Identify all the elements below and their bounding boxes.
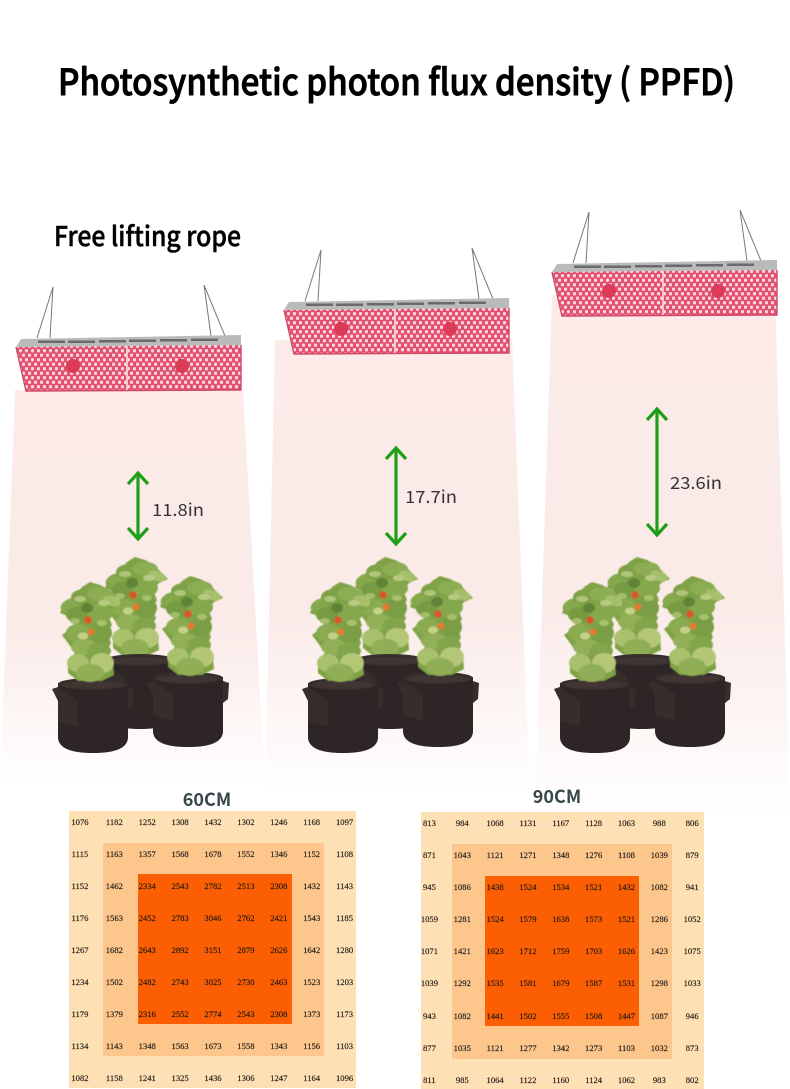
PPFD heat map: 60CM: 2308 <box>270 881 287 891</box>
PPFD heat map: 90CM: 1071 <box>421 946 438 956</box>
PPFD heat map: 60CM: 2879 <box>237 945 254 955</box>
PPFD heat map: 90CM: 1122 <box>520 1075 536 1085</box>
PPFD heat map: 90CM: 1167 <box>552 818 569 828</box>
PPFD heat map: 60CM: 1143 <box>336 881 353 891</box>
PPFD heat map: 90CM: 802 <box>686 1075 699 1085</box>
PPFD heat map: 60CM: 1568 <box>172 849 189 859</box>
PPFD heat map: 90CM: 1579 <box>519 914 537 924</box>
PPFD heat map: 90CM: 983 <box>653 1075 666 1085</box>
PPFD heat map: 90CM: 1039 <box>651 850 668 860</box>
PPFD heat map: 90CM: 871 <box>423 850 436 860</box>
PPFD heat map: 90CM: 1124 <box>585 1075 602 1085</box>
plants in pots: 11.8in <box>52 557 229 753</box>
plants in pots: 23.6in <box>554 557 731 753</box>
PPFD heat map: 60CM: 2421 <box>270 913 287 923</box>
PPFD heat map: 90CM: 1082 <box>454 1011 471 1021</box>
PPFD heat map: 90CM: 1087 <box>651 1011 668 1021</box>
PPFD heat map: 60CM: 1373 <box>303 1009 320 1019</box>
PPFD heat map: 90CM: 1068 <box>487 818 504 828</box>
PPFD heat map: 60CM: 1185 <box>336 913 353 923</box>
PPFD heat map: 90CM: 1271 <box>519 850 537 860</box>
PPFD heat map: 90CM: 1703 <box>585 946 602 956</box>
PPFD heat map: 90CM: 1626 <box>618 946 635 956</box>
PPFD heat map: 60CM: 2463 <box>270 977 287 987</box>
plants in pots: 17.7in <box>302 557 479 753</box>
PPFD heat map: 60CM: 1173 <box>336 1009 353 1019</box>
PPFD heat map: 60CM: 2543 <box>172 881 189 891</box>
PPFD heat map: 60CM: 1642 <box>303 945 320 955</box>
PPFD heat map: 60CM: 1179 <box>72 1009 88 1019</box>
PPFD heat map: 60CM: 1432 <box>204 817 222 827</box>
PPFD heat map: 90CM: 1432 <box>618 882 635 892</box>
PPFD heat map: 60CM: 1158 <box>106 1073 123 1083</box>
PPFD heat map: 60CM: 2552 <box>172 1009 189 1019</box>
PPFD heat map: 90CM: 1064 <box>487 1075 504 1085</box>
PPFD heat map: 60CM: 2774 <box>204 1009 222 1019</box>
PPFD heat map: 60CM: 1346 <box>270 849 287 859</box>
PPFD heat map: 60CM: 1234 <box>71 977 89 987</box>
PPFD heat map: 90CM: 1063 <box>618 818 635 828</box>
PPFD heat map: 90CM: 1423 <box>651 946 668 956</box>
PPFD heat map: 90CM: 1447 <box>618 1011 635 1021</box>
PPFD heat map: 60CM: 1156 <box>303 1041 320 1051</box>
PPFD heat map: 90CM: 1052 <box>684 914 701 924</box>
PPFD heat map: 60CM: 1115 <box>72 849 88 859</box>
heading: 60CM: 60CM <box>183 786 231 812</box>
distance label: 11.8in: 11.8in <box>152 496 204 521</box>
arrow: 23.6in <box>647 409 667 535</box>
PPFD heat map: 90CM: 1286 <box>651 914 668 924</box>
PPFD heat map: 90CM: 1521 <box>618 914 635 924</box>
PPFD heat map: 60CM: 1343 <box>270 1041 287 1051</box>
PPFD heat map: 90CM: 1033 <box>684 978 701 988</box>
PPFD heat map: 90CM: 1277 <box>519 1043 537 1053</box>
PPFD heat map: 60CM: 1096 <box>336 1073 353 1083</box>
PPFD heat map: 90CM: 943 <box>423 1011 436 1021</box>
PPFD heat map: 60CM: 2762 <box>237 913 254 923</box>
PPFD heat map: 60CM: 1097 <box>336 817 353 827</box>
PPFD heat map: 60CM: 1523 <box>303 977 320 987</box>
PPFD heat map: 90CM: 1342 <box>552 1043 569 1053</box>
light beam: 11.8in <box>0 390 265 785</box>
PPFD heat map: 60CM: 1325 <box>172 1073 189 1083</box>
heading: 90CM: 90CM <box>533 783 581 809</box>
PPFD heat map: 90CM: 1103 <box>618 1043 635 1053</box>
lamp at 23.6in <box>552 210 777 316</box>
PPFD heat map: 90CM: 1035 <box>454 1043 471 1053</box>
PPFD heat map: 60CM: 2482 <box>139 977 156 987</box>
arrow: 17.7in <box>386 448 406 544</box>
PPFD heat map: 90CM: 984 <box>456 818 469 828</box>
PPFD heat map: 90CM: 1712 <box>519 946 537 956</box>
PPFD heat map: 60CM: 1558 <box>237 1041 254 1051</box>
PPFD heat map: 90CM: 879 <box>686 850 699 860</box>
PPFD heat map: 90CM: 873 <box>686 1043 699 1053</box>
PPFD heat map: 90CM: 1062 <box>618 1075 635 1085</box>
PPFD heat map: 60CM: 1182 <box>106 817 123 827</box>
PPFD heat map: 60CM: 1543 <box>303 913 320 923</box>
PPFD heat map: 60CM: 2782 <box>204 881 222 891</box>
PPFD heat map: 90CM: 1032 <box>651 1043 668 1053</box>
PPFD heat map: 90CM: 945 <box>423 882 436 892</box>
PPFD heat map: 90CM: 1131 <box>520 818 536 828</box>
PPFD heat map: 60CM: 1252 <box>139 817 156 827</box>
PPFD heat map: 60CM: 1082 <box>71 1073 89 1083</box>
PPFD heat map: 60CM: 1357 <box>139 849 156 859</box>
PPFD heat map: 60CM: 2334 <box>139 881 156 891</box>
PPFD heat map: 90CM: 1298 <box>651 978 668 988</box>
PPFD heat map: 90CM: 1587 <box>585 978 602 988</box>
PPFD heat map: 90CM: 1531 <box>618 978 635 988</box>
PPFD heat map: 60CM: 1302 <box>237 817 254 827</box>
rope label: Free lifting rope <box>54 215 241 254</box>
PPFD heat map: 60CM: 1134 <box>72 1041 88 1051</box>
title: Photosynthetic photon flux density ( PPFD) <box>58 54 735 106</box>
PPFD heat map: 90CM: 946 <box>686 1011 699 1021</box>
PPFD heat map: 90CM: 1039 <box>421 978 438 988</box>
PPFD heat map: 90CM: 1581 <box>519 978 537 988</box>
PPFD heat map: 60CM: 1432 <box>303 881 320 891</box>
PPFD heat map: 60CM: 1176 <box>72 913 88 923</box>
PPFD heat map: 60CM: 1678 <box>204 849 222 859</box>
lamp at 17.7in <box>284 248 509 354</box>
PPFD heat map: 90CM: 1273 <box>585 1043 602 1053</box>
PPFD heat map: 90CM: 1128 <box>585 818 602 828</box>
PPFD heat map: 60CM: 2730 <box>237 977 254 987</box>
PPFD heat map: 60CM: 2452 <box>139 913 156 923</box>
PPFD heat map: 90CM: 1502 <box>519 1011 537 1021</box>
PPFD heat map: 60CM: 2543 <box>237 1009 254 1019</box>
PPFD heat map: 90CM: 806 <box>686 818 699 828</box>
PPFD heat map: 90CM: 1108 <box>618 850 635 860</box>
PPFD heat map: 60CM: 1502 <box>106 977 123 987</box>
arrow: 11.8in <box>128 473 148 539</box>
PPFD heat map: 90CM: 1521 <box>585 882 602 892</box>
PPFD heat map: 60CM: 1152 <box>303 849 320 859</box>
PPFD heat map: 90CM: 1281 <box>454 914 471 924</box>
PPFD heat map: 90CM: 1075 <box>684 946 701 956</box>
PPFD heat map: 60CM: 1563 <box>106 913 123 923</box>
PPFD heat map: 90CM: 1292 <box>454 978 471 988</box>
PPFD heat map: 60CM: 1164 <box>303 1073 320 1083</box>
PPFD heat map: 90CM: 877 <box>423 1043 436 1053</box>
PPFD heat map: 60CM: 1203 <box>336 977 353 987</box>
PPFD heat map: 60CM: 3025 <box>204 977 222 987</box>
PPFD heat map: 60CM: 1152 <box>72 881 88 891</box>
PPFD heat map: 60CM: 1306 <box>237 1073 254 1083</box>
PPFD heat map: 60CM: 1163 <box>106 849 123 859</box>
PPFD heat map: 60CM: 1108 <box>336 849 353 859</box>
PPFD heat map: 60CM: 2783 <box>172 913 189 923</box>
PPFD heat map: 60CM: 1143 <box>106 1041 123 1051</box>
PPFD heat map: 90CM: 1555 <box>552 1011 569 1021</box>
PPFD heat map: 90CM: 1121 <box>487 1043 504 1053</box>
PPFD heat map: 90CM: 1438 <box>487 882 504 892</box>
PPFD heat map: 90CM: 985 <box>456 1075 469 1085</box>
PPFD heat map: 90CM: 811 <box>423 1075 436 1085</box>
PPFD heat map: 90CM: 1160 <box>552 1075 569 1085</box>
PPFD heat map: 60CM: 2316 <box>139 1009 156 1019</box>
PPFD heat map: 90CM: 1059 <box>421 914 438 924</box>
PPFD heat map: 60CM: 1241 <box>139 1073 156 1083</box>
PPFD heat map: 90CM: 1086 <box>454 882 471 892</box>
PPFD heat map: 90CM: 1348 <box>552 850 569 860</box>
PPFD heat map: 60CM: 1379 <box>106 1009 123 1019</box>
PPFD heat map: 60CM: 1682 <box>106 945 123 955</box>
PPFD heat map: 90CM: 1535 <box>487 978 504 988</box>
PPFD heat map: 90CM: 1043 <box>454 850 471 860</box>
PPFD heat map: 90CM: 1573 <box>585 914 602 924</box>
PPFD heat map: 60CM: 3151 <box>204 945 222 955</box>
distance label: 17.7in: 17.7in <box>405 483 457 508</box>
PPFD heat map: 90CM: 941 <box>686 882 699 892</box>
PPFD heat map: 60CM: 1436 <box>204 1073 222 1083</box>
PPFD heat map: 90CM: 1421 <box>454 946 471 956</box>
PPFD heat map: 60CM: 1076 <box>71 817 89 827</box>
PPFD heat map: 90CM: 1524 <box>519 882 537 892</box>
PPFD heat map: 60CM: 2626 <box>270 945 287 955</box>
PPFD heat map: 60CM: 2743 <box>172 977 189 987</box>
PPFD heat map: 60CM: 1247 <box>270 1073 287 1083</box>
PPFD heat map: 90CM: 1524 <box>487 914 504 924</box>
PPFD heat map: 90CM: 988 <box>653 818 666 828</box>
PPFD heat map: 90CM: 1623 <box>487 946 504 956</box>
PPFD heat map: 60CM: 1563 <box>172 1041 189 1051</box>
PPFD heat map: 90CM: 813 <box>423 818 436 828</box>
PPFD heat map: 90CM: 1441 <box>487 1011 504 1021</box>
PPFD heat map: 60CM: 2308 <box>270 1009 287 1019</box>
PPFD heat map: 90CM: 1759 <box>552 946 569 956</box>
PPFD heat map: 60CM: 1552 <box>237 849 254 859</box>
PPFD heat map: 60CM: 1168 <box>303 817 320 827</box>
PPFD heat map: 90CM: 1534 <box>552 882 569 892</box>
PPFD heat map: 60CM: 1280 <box>336 945 353 955</box>
PPFD heat map: 90CM: 1121 <box>487 850 504 860</box>
PPFD heat map: 60CM: 2892 <box>172 945 189 955</box>
PPFD heat map: 60CM: 1462 <box>106 881 123 891</box>
light beam: 23.6in <box>535 295 790 815</box>
PPFD heat map: 60CM: 1103 <box>336 1041 353 1051</box>
PPFD heat map: 60CM: 1246 <box>270 817 287 827</box>
lamp at 11.8in <box>16 285 241 391</box>
PPFD heat map: 60CM: 2643 <box>139 945 156 955</box>
distance label: 23.6in: 23.6in <box>670 469 722 494</box>
PPFD heat map: 60CM: 1267 <box>71 945 89 955</box>
PPFD heat map: 90CM: 1276 <box>585 850 602 860</box>
PPFD heat map: 60CM: 3046 <box>204 913 222 923</box>
light beam: 17.7in <box>265 340 530 795</box>
PPFD heat map: 60CM: 1348 <box>139 1041 156 1051</box>
PPFD heat map: 90CM: 1679 <box>552 978 569 988</box>
PPFD heat map: 60CM: 1308 <box>172 817 189 827</box>
PPFD heat map: 60CM: 2513 <box>237 881 254 891</box>
PPFD heat map: 90CM: 1082 <box>651 882 668 892</box>
PPFD heat map: 90CM: 1508 <box>585 1011 602 1021</box>
PPFD heat map: 90CM: 1638 <box>552 914 569 924</box>
PPFD heat map: 60CM: 1673 <box>204 1041 222 1051</box>
